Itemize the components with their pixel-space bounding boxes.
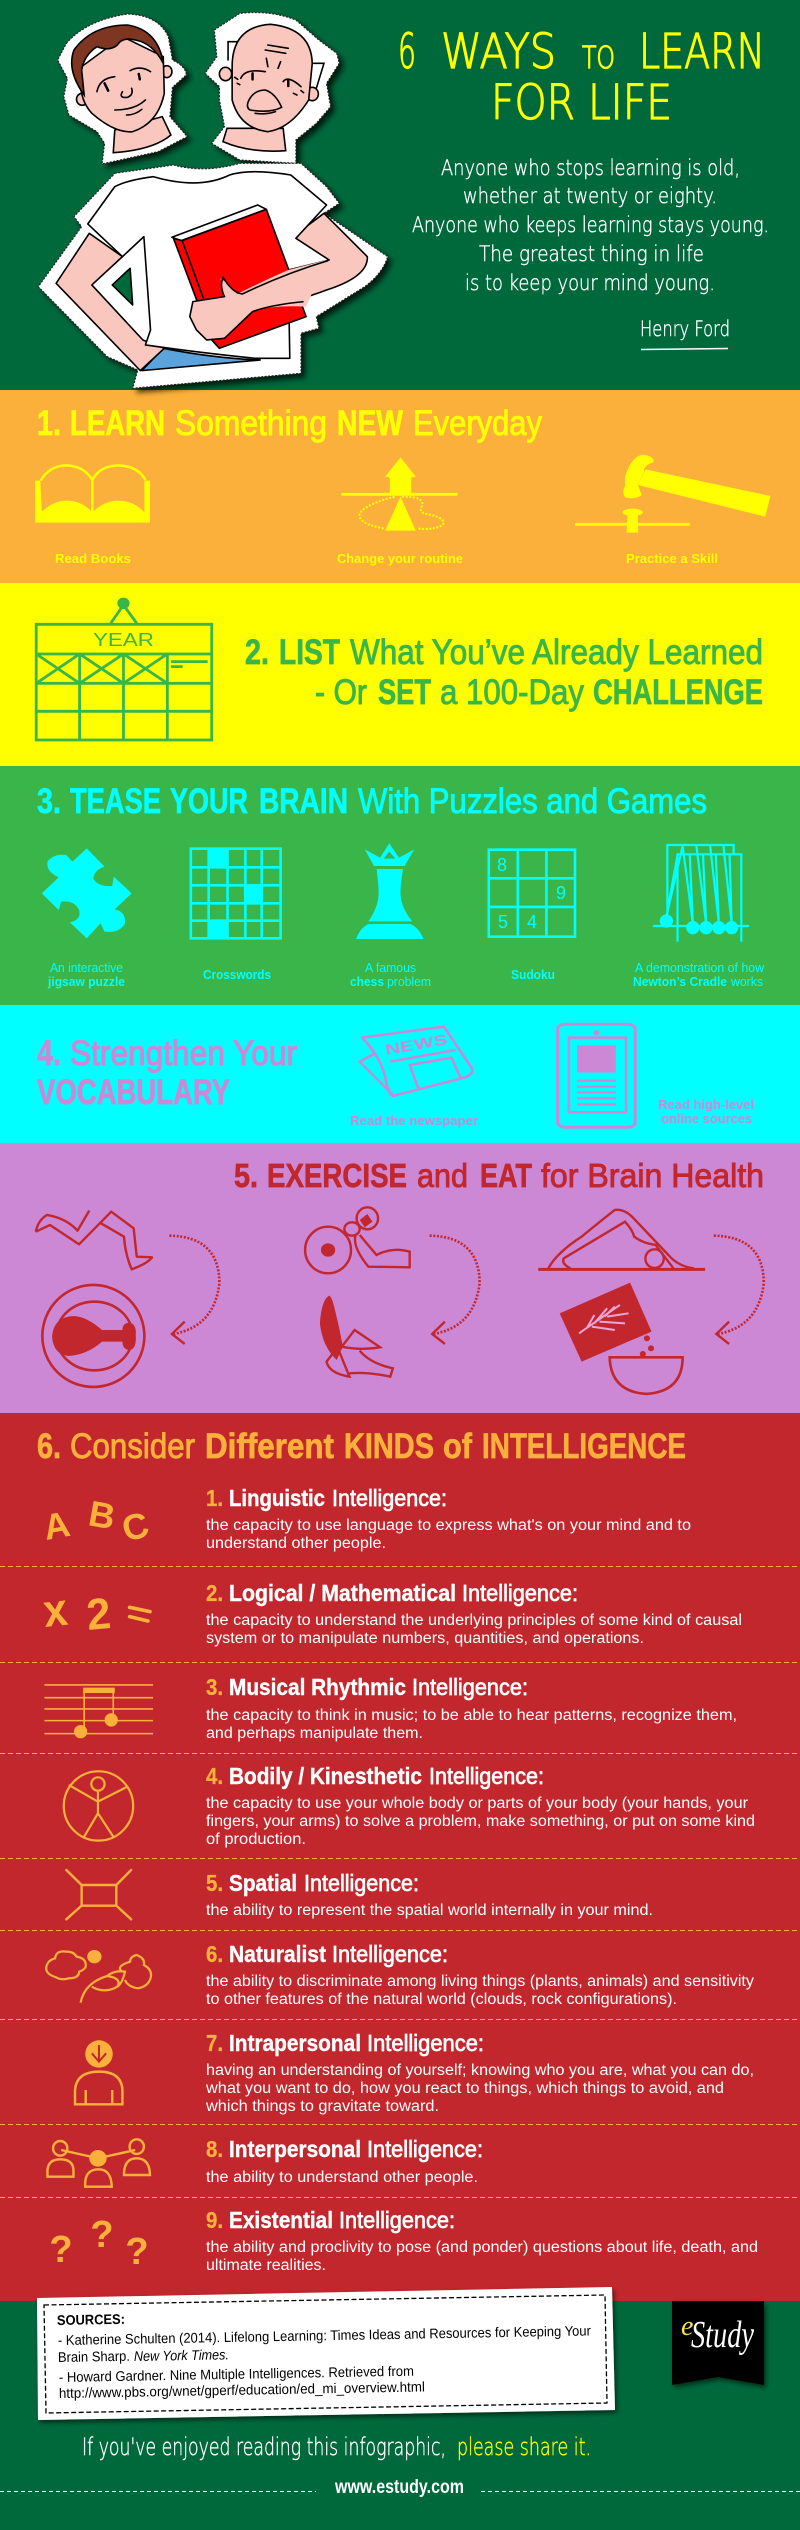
- title: FOR LIFE: [491, 75, 672, 131]
- heading: section 1: [37, 404, 542, 443]
- icon: A B C letters: [40, 1493, 153, 1550]
- icon: connected people: [47, 2139, 150, 2187]
- label: read high-level online sources: online sources: [661, 1111, 752, 1126]
- heading: section 2: SET: [378, 673, 431, 712]
- heading: section 6: [37, 1427, 686, 1466]
- item: musical rhythmic intelligence: [206, 1674, 737, 1742]
- quote attribution: Henry Ford: Henry Ford: [640, 317, 730, 341]
- item: musical rhythmic intelligence: Intelligence:: [412, 1674, 528, 1700]
- panel: 1 learn something new: [0, 390, 800, 583]
- callout: sources: Brain Sharp.: [58, 2348, 130, 2365]
- icon: A B C letters: B: [86, 1493, 118, 1537]
- item: linguistic intelligence: the capacity to use language to express what's on your mind and to: [206, 1517, 691, 1534]
- icon: hammer and nail: [575, 455, 770, 533]
- item: naturalist intelligence: Intelligence:: [332, 1941, 448, 1967]
- label: Newton's Cradle: [633, 960, 765, 989]
- icon: Newton's cradle: [653, 845, 749, 942]
- item: linguistic intelligence: [206, 1485, 691, 1552]
- arrow: yoga to spice: [714, 1236, 764, 1344]
- heading: section 6: 6.: [37, 1427, 61, 1466]
- heading: section 6: INTELLIGENCE: [482, 1427, 686, 1466]
- item: interpersonal intelligence: the ability to understand other people.: [206, 2169, 478, 2186]
- heading: section 4: [37, 1034, 297, 1112]
- item: intrapersonal intelligence: Intrapersonal: [229, 2030, 361, 2056]
- heading: section 5: EAT: [480, 1157, 532, 1194]
- label: read the newspaper: Read the newspaper: [350, 1113, 478, 1128]
- heading: section 3: TEASE: [70, 782, 161, 821]
- heading: section 5: 5.: [234, 1157, 258, 1194]
- label: crosswords: Crosswords: [203, 967, 271, 982]
- label: read high-level online sources: Read high-level: [658, 1097, 754, 1112]
- item: existential intelligence: 9.: [206, 2207, 223, 2233]
- icon: question marks: ?: [125, 2231, 149, 2273]
- label: chess problem: A famous: [365, 960, 416, 975]
- icon: question marks: ?: [49, 2229, 73, 2271]
- item: musical rhythmic intelligence: and perhaps manipulate them.: [206, 1725, 423, 1742]
- heading: section 3: BRAIN: [259, 782, 348, 821]
- item: logical mathematical intelligence: Intelligence:: [462, 1580, 578, 1606]
- icon: herb packet and bowl: [560, 1283, 683, 1394]
- icon: newspaper: [360, 1027, 472, 1096]
- item: logical mathematical intelligence: 2.: [206, 1580, 223, 1606]
- heading: section 2: a 100-Day: [440, 673, 584, 712]
- icon: sudoku grid: 9: [556, 883, 566, 903]
- item: existential intelligence: ultimate realities.: [206, 2257, 326, 2274]
- item: bodily kinesthetic intelligence: the capacity to use your whole body or parts of your body (your hands, your: [206, 1795, 748, 1812]
- label: chess problem: problem: [387, 974, 431, 989]
- icon: yoga pose: [538, 1210, 705, 1269]
- item: interpersonal intelligence: [206, 2136, 483, 2186]
- icon: music staff: [44, 1685, 153, 1738]
- item: spatial intelligence: the ability to represent the spatial world internally in your mind.: [206, 1902, 653, 1919]
- heading: section 5: EXERCISE: [267, 1157, 407, 1194]
- item: bodily kinesthetic intelligence: Bodily / Kinesthetic: [229, 1763, 422, 1789]
- panel: footer: [0, 2287, 800, 2530]
- icon: peeled banana: [320, 1296, 393, 1377]
- icon: chess queen: [356, 843, 423, 939]
- item: bodily kinesthetic intelligence: 4.: [206, 1763, 223, 1789]
- icon: x 2 equals: [41, 1583, 150, 1640]
- arrow: cycling to banana: [430, 1236, 480, 1344]
- title: [398, 24, 765, 131]
- item: intrapersonal intelligence: what you want to do, how you react to things, which things to avoid, and: [205, 2080, 724, 2097]
- heading: section 1: LEARN: [70, 404, 165, 443]
- label: change your routine: Change your routine: [337, 551, 463, 566]
- item: existential intelligence: the ability and proclivity to pose (and ponder) questions about life, death, and: [206, 2239, 758, 2256]
- icon: tablet: [558, 1024, 635, 1127]
- item: intrapersonal intelligence: Intelligence:: [367, 2030, 484, 2056]
- item: existential intelligence: [206, 2207, 758, 2274]
- item: bodily kinesthetic intelligence: fingers, your arms) to solve a problem, make something, or put on some kind: [206, 1813, 755, 1830]
- icon: A B C letters: A: [40, 1503, 73, 1548]
- label: jigsaw puzzle: jigsaw puzzle: [47, 974, 125, 989]
- title: TO: [582, 41, 615, 76]
- quote: Anyone who stops learning is old,: [441, 156, 740, 180]
- icon: sudoku grid: 8: [497, 855, 507, 875]
- panel: 3 tease your brain: [0, 766, 800, 1005]
- heading: section 6: Different: [205, 1427, 334, 1466]
- heading: section 6: Consider: [70, 1427, 195, 1466]
- item: bodily kinesthetic intelligence: Intelligence:: [429, 1763, 544, 1789]
- heading: section 3: [37, 782, 707, 821]
- item: logical mathematical intelligence: Logical / Mathematical: [229, 1580, 456, 1606]
- item: intrapersonal intelligence: [205, 2030, 754, 2115]
- item: spatial intelligence: Intelligence:: [304, 1870, 419, 1896]
- item: existential intelligence: Existential: [229, 2207, 333, 2233]
- title: WAYS: [441, 24, 556, 80]
- heading: section 1: Everyday: [413, 404, 542, 443]
- label: practice a skill: Practice a Skill: [626, 551, 718, 566]
- label: sudoku: Sudoku: [511, 967, 555, 982]
- heading: section 6: KINDS: [344, 1427, 434, 1466]
- badge: eStudy logo: e: [681, 2311, 693, 2342]
- icon: A B C letters: C: [117, 1503, 153, 1550]
- item: interpersonal intelligence: 8.: [206, 2136, 223, 2162]
- badge: eStudy logo: [672, 2301, 764, 2385]
- heading: section 1: NEW: [337, 404, 403, 443]
- quote: whether at twenty or eighty.: [463, 184, 717, 208]
- icon: person with inward arrow: [75, 2040, 122, 2104]
- item: naturalist intelligence: to other features of the natural world (clouds, rock configurations).: [206, 1991, 677, 2008]
- item: logical mathematical intelligence: [206, 1580, 742, 1647]
- icon: question marks: [49, 2214, 149, 2273]
- quote: is to keep your mind young.: [465, 271, 715, 295]
- item: naturalist intelligence: the ability to discriminate among living things (plants, animals) and sensitivity: [206, 1973, 754, 1990]
- heading: section 2: - Or: [315, 673, 367, 712]
- icon: year calendar: [36, 598, 212, 740]
- label: chess problem: chess: [350, 974, 384, 989]
- label: read high-level online sources: [658, 1097, 754, 1126]
- heading: section 5: for Brain Health: [541, 1157, 764, 1194]
- item: logical mathematical intelligence: the capacity to understand the underlying principles of some kind of causal: [206, 1612, 742, 1629]
- item: linguistic intelligence: understand other people.: [206, 1535, 386, 1552]
- item: naturalist intelligence: Naturalist: [229, 1941, 326, 1967]
- callout: sources: - Katherine Schulten (2014). Lifelong Learning: Times Ideas and Resources for Keeping Your: [58, 2322, 591, 2348]
- heading: section 2: 2.: [245, 633, 269, 672]
- item: interpersonal intelligence: Interpersonal: [229, 2136, 361, 2162]
- label: chess problem: [350, 960, 431, 989]
- label: Newton's Cradle: A demonstration of how: [635, 960, 765, 975]
- icon: x 2 equals: x: [41, 1583, 70, 1637]
- quote: [412, 156, 769, 295]
- icon: cycling leg: [305, 1207, 410, 1273]
- item: logical mathematical intelligence: system or to manipulate numbers, quantities, and operations.: [206, 1630, 644, 1647]
- heading: section 3: With Puzzles and Games: [358, 782, 707, 821]
- heading: section 6: of: [443, 1427, 472, 1466]
- callout: sources: http://www.pbs.org/wnet/gperf/education/ed_mi_overview.html: [59, 2378, 425, 2401]
- quote attribution: Henry Ford: [640, 317, 730, 350]
- heading: section 1: Something: [175, 404, 327, 443]
- heading: section 4: VOCABULARY: [37, 1073, 230, 1112]
- panel: 5 exercise and eat: [0, 1143, 800, 1413]
- label: jigsaw puzzle: An interactive: [50, 960, 123, 975]
- panel: 2 list what you've learned: [0, 583, 800, 766]
- icon: sudoku grid: 4: [527, 912, 537, 932]
- callout: sources: - Howard Gardner. Nine Multiple Intelligences. Retrieved from: [59, 2363, 414, 2385]
- item: intrapersonal intelligence: which things to gravitate toward.: [205, 2098, 439, 2115]
- heading: section 4: 4.: [37, 1034, 61, 1073]
- item: naturalist intelligence: [206, 1941, 754, 2008]
- label: Newton's Cradle: Newton’s Cradle: [633, 974, 727, 989]
- badge: eStudy logo: Study: [691, 2314, 754, 2356]
- panel: 4 strengthen vocabulary: [0, 1005, 800, 1143]
- label: jigsaw puzzle: [47, 960, 125, 989]
- item: intrapersonal intelligence: having an understanding of yourself; knowing who you are, what you can do,: [206, 2062, 754, 2079]
- icon: jigsaw piece: [42, 848, 132, 938]
- icon: arrow head 1: [172, 1322, 185, 1344]
- icon: crossword grid: [191, 849, 281, 938]
- heading: section 4: Strengthen Your: [70, 1034, 297, 1073]
- illustration: torso with red book sticker: [38, 163, 388, 388]
- panel: header: [0, 0, 800, 390]
- text: share request: If you've enjoyed reading this infographic,: [82, 2433, 446, 2461]
- label: read books: Read Books: [55, 551, 131, 566]
- callout: sources: [37, 2287, 615, 2420]
- icon: sudoku grid: [489, 850, 575, 937]
- text: share request: please share it.: [457, 2433, 591, 2461]
- heading: section 1: 1.: [37, 404, 61, 443]
- icon: cloud, sun and flower: [46, 1950, 151, 2003]
- heading: section 2: [245, 633, 763, 712]
- icon: year calendar: YEAR: [93, 630, 154, 650]
- callout: sources: New York Times.: [134, 2346, 229, 2364]
- item: spatial intelligence: [206, 1870, 653, 1919]
- icon: change routine arrow: [341, 457, 458, 531]
- item: spatial intelligence: Spatial: [229, 1870, 297, 1896]
- icon: open book: [35, 465, 150, 523]
- icon: running legs: [36, 1211, 152, 1269]
- icon: spatial cube: [66, 1870, 131, 1919]
- heading: section 2: What You’ve Already Learned: [350, 633, 763, 672]
- panel: 6 kinds of intelligence: [0, 1413, 800, 2301]
- heading: section 5: [234, 1157, 764, 1194]
- icon: drumstick on plate: [42, 1285, 144, 1387]
- arrow: running to drumstick: [169, 1236, 219, 1334]
- item: intrapersonal intelligence: 7.: [206, 2030, 223, 2056]
- item: musical rhythmic intelligence: the capacity to think in music; to be able to hear patterns, recognize them,: [206, 1707, 737, 1724]
- title: LEARN: [639, 24, 765, 80]
- heading: section 5: and: [417, 1157, 468, 1194]
- title: 6: [398, 24, 416, 80]
- text: website url: www.estudy.com: [334, 2477, 464, 2498]
- icon: vitruvian man: [64, 1771, 133, 1841]
- item: bodily kinesthetic intelligence: of production.: [206, 1831, 306, 1848]
- item: bodily kinesthetic intelligence: [206, 1763, 755, 1848]
- illustration: young man head sticker: [58, 14, 187, 164]
- icon: newspaper: NEWS: [384, 1031, 449, 1059]
- item: musical rhythmic intelligence: 3.: [206, 1674, 223, 1700]
- heading: section 3: 3.: [37, 782, 61, 821]
- item: linguistic intelligence: Intelligence:: [332, 1485, 447, 1511]
- item: spatial intelligence: 5.: [206, 1870, 223, 1896]
- item: linguistic intelligence: 1.: [206, 1485, 223, 1511]
- icon: x 2 equals: 2: [85, 1589, 113, 1640]
- item: existential intelligence: Intelligence:: [339, 2207, 455, 2233]
- item: naturalist intelligence: 6.: [206, 1941, 223, 1967]
- icon: question marks: ?: [90, 2214, 114, 2256]
- heading: section 2: LIST: [279, 633, 340, 672]
- quote: The greatest thing in life: [479, 242, 704, 266]
- item: musical rhythmic intelligence: Musical Rhythmic: [229, 1674, 406, 1700]
- illustration: old man head sticker: [205, 12, 339, 163]
- callout: sources: SOURCES:: [57, 2311, 125, 2328]
- item: linguistic intelligence: Linguistic: [229, 1485, 325, 1511]
- heading: section 3: YOUR: [170, 782, 248, 821]
- icon: sudoku grid: 5: [498, 912, 508, 932]
- label: Newton's Cradle: works: [730, 974, 763, 989]
- item: interpersonal intelligence: Intelligence:: [367, 2136, 483, 2162]
